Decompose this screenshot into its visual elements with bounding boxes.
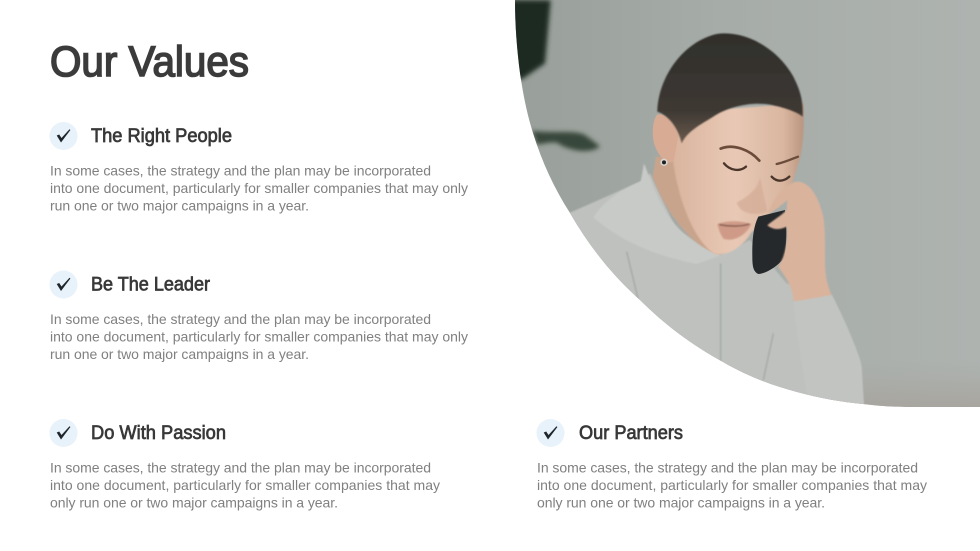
heading: The Right People [91, 126, 232, 147]
text block: into one document, particularly for smaller companies that may only [50, 180, 468, 196]
mouth [717, 221, 751, 240]
value: Do With Passion [50, 419, 440, 510]
value: The Right People [50, 122, 468, 214]
ear [653, 114, 678, 162]
text block: In some cases, the strategy and the plan may be incorporated [50, 311, 431, 327]
text block: only run one or two major campaigns in a year. [50, 494, 338, 510]
heading: Do With Passion [91, 423, 226, 444]
eyebrows and eyes [721, 147, 798, 181]
plant leaves [510, 0, 600, 151]
face [667, 103, 804, 254]
text block: into one document, particularly for smaller companies that may [50, 477, 440, 493]
phone [752, 210, 786, 274]
text block: run one or two major campaigns in a year. [50, 198, 309, 214]
icon: check [50, 122, 78, 150]
value: Our Partners [536, 419, 927, 510]
sleeve [793, 295, 864, 410]
value: Be The Leader [50, 270, 468, 362]
heading: Be The Leader [91, 274, 211, 296]
text block: run one or two major campaigns in a year. [50, 346, 309, 362]
collar [593, 163, 721, 264]
text block [50, 311, 468, 362]
title: Our Values [50, 38, 249, 86]
wall background [510, 0, 980, 410]
sweater body [570, 174, 808, 394]
photo: woman on the phone [510, 0, 980, 410]
text block: In some cases, the strategy and the plan may be incorporated [50, 460, 431, 476]
text block: In some cases, the strategy and the plan may be incorporated [50, 162, 431, 178]
text block [537, 460, 927, 510]
text block: only run one or two major campaigns in a year. [537, 494, 825, 510]
text block: into one document, particularly for smaller companies that may only [50, 328, 468, 344]
earring [660, 159, 668, 166]
text block: In some cases, the strategy and the plan may be incorporated [537, 460, 918, 476]
hand [767, 182, 832, 303]
icon: check [50, 270, 78, 298]
text block: into one document, particularly for smaller companies that may [537, 477, 927, 493]
icon: check [50, 419, 78, 447]
text block [50, 162, 468, 214]
nose shading [737, 180, 766, 214]
neck [652, 156, 713, 252]
text block [50, 460, 440, 510]
sweater seams [627, 252, 773, 380]
hair [657, 33, 803, 143]
icon: check [536, 419, 564, 447]
heading: Our Partners [579, 423, 683, 444]
